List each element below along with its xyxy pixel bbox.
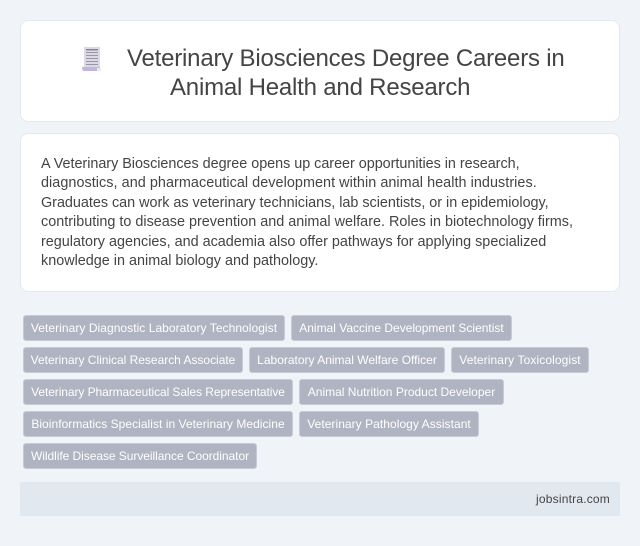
title — [127, 45, 565, 101]
tag — [23, 347, 243, 373]
tag: Animal Vaccine Development Scientist — [299, 321, 504, 335]
description panel — [20, 133, 620, 292]
tag: Laboratory Animal Welfare Officer — [257, 353, 437, 367]
tag: Animal Nutrition Product Developer — [308, 385, 495, 399]
tag: Veterinary Pharmaceutical Sales Representative — [31, 385, 285, 399]
career tags — [23, 315, 589, 469]
tag: Veterinary Pathology Assistant — [307, 417, 471, 431]
description text: knowledge in animal biology and pathology. — [41, 253, 318, 269]
tag: Veterinary Toxicologist — [459, 353, 581, 367]
tag — [299, 379, 504, 405]
title: Animal Health and Research — [170, 74, 470, 101]
tag — [451, 347, 589, 373]
tag — [299, 411, 479, 437]
footer source: jobsintra.com — [536, 492, 610, 506]
icon: document scroll — [82, 47, 101, 71]
header panel — [20, 20, 620, 122]
description text: A Veterinary Biosciences degree opens up career opportunities in research, — [41, 156, 520, 172]
tag — [23, 379, 293, 405]
tag — [23, 411, 293, 437]
description text: regulatory agencies, and academia also offer pathways for applying specialized — [41, 234, 546, 250]
tag — [23, 315, 285, 341]
tag: Veterinary Clinical Research Associate — [31, 353, 235, 367]
tag: Wildlife Disease Surveillance Coordinator — [31, 449, 249, 463]
tag — [23, 443, 257, 469]
description text: diagnostics, and pharmaceutical development within animal health industries. — [41, 175, 537, 191]
tag: Veterinary Diagnostic Laboratory Technologist — [31, 321, 277, 335]
title: Veterinary Biosciences Degree Careers in — [127, 45, 565, 72]
description text: Graduates can work as veterinary technicians, lab scientists, or in epidemiology, — [41, 195, 549, 211]
footer bar — [20, 482, 620, 516]
tag — [291, 315, 512, 341]
description text: contributing to disease prevention and animal welfare. Roles in biotechnology firms, — [41, 214, 573, 230]
tag — [249, 347, 445, 373]
tag: Bioinformatics Specialist in Veterinary Medicine — [31, 417, 285, 431]
description text — [41, 156, 573, 269]
